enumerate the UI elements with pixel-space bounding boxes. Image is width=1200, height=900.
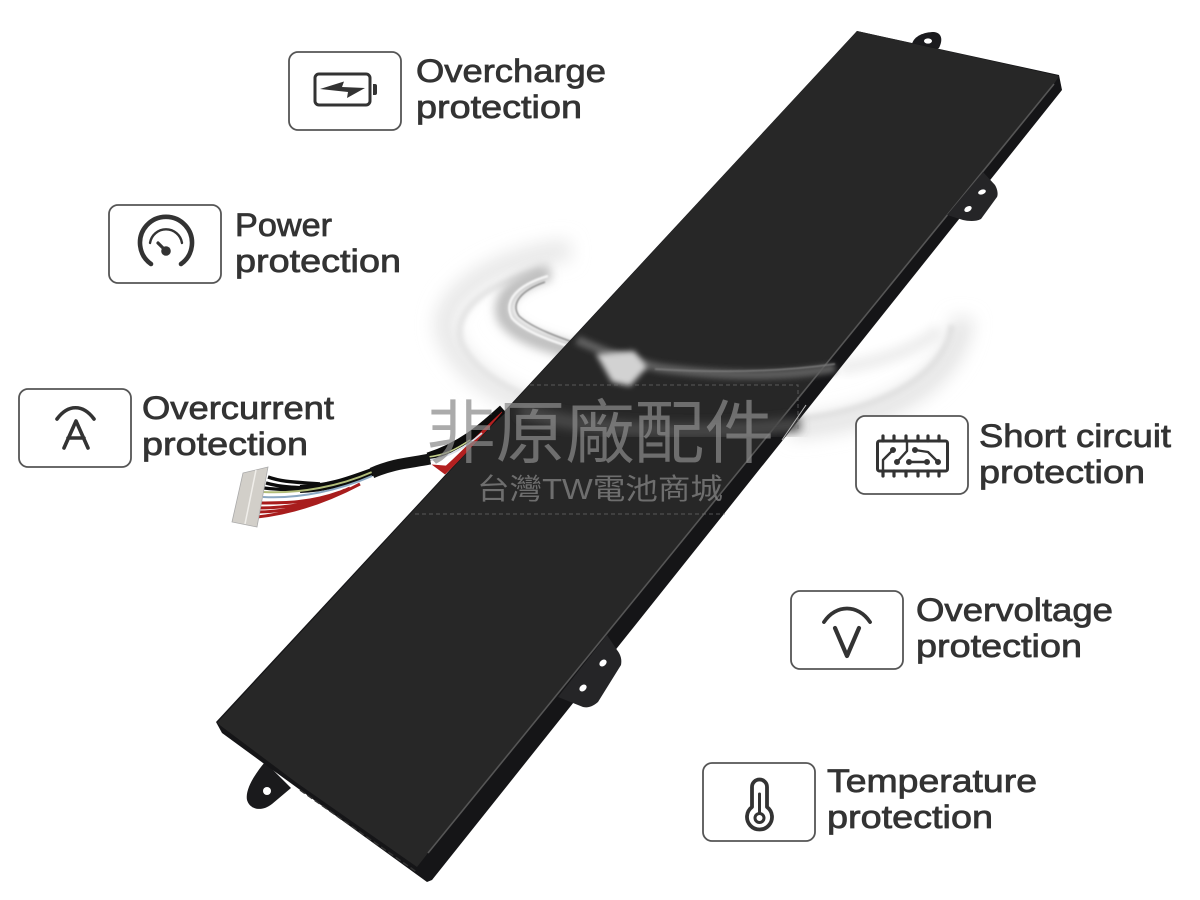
feature: overvoltage protection [791,591,1113,669]
black sleeve [372,459,430,473]
label: Power [235,207,332,243]
watermark dashed frame [415,385,798,514]
connector [232,467,268,527]
label line 2: protection [235,243,401,279]
feature: power protection [109,205,401,283]
end connector grooves [300,790,418,873]
label line 2: protection [416,89,582,125]
watermark [415,385,798,514]
top surface edge highlight [428,84,1054,853]
label: Overvoltage [916,592,1113,628]
mounting tab: top [912,32,941,52]
watermark main text: 非原廠配件 [426,395,774,472]
cable [232,409,503,527]
icon box: thermometer [703,763,815,841]
battery [216,31,1062,882]
label line 2: protection [142,426,308,462]
icon box: circuit chip [856,416,968,494]
feature: temperature protection [703,763,1037,841]
label line 2: protection [827,799,993,835]
label: Temperature [827,763,1037,799]
red wires [257,484,360,517]
battery top surface [217,31,1059,867]
feature: overcurrent protection [19,389,334,467]
label line 2: protection [979,454,1145,490]
label: Short circuit [979,418,1171,454]
icon box: gauge [109,205,221,283]
mounting tab: right [947,172,998,221]
battery side wall [216,31,1062,882]
feature: overcharge protection [289,52,606,130]
cable sheath [300,471,375,489]
label: Overcharge [416,53,606,89]
swirl highlights over battery [520,340,835,440]
black wires fan [264,477,330,489]
icon box: battery bolt [289,52,401,130]
swirl behind battery [445,250,963,435]
green and blue wires [263,472,372,492]
mounting tab: middle [558,635,621,707]
label line 2: protection [916,628,1082,664]
icon box: ampere [19,389,131,467]
feature: short circuit protection [856,416,1171,494]
icon box: voltage [791,591,903,669]
label: Overcurrent [142,390,334,426]
mounting tab: bottom [247,762,291,809]
watermark sub text: 台灣TW電池商城 [477,473,723,506]
